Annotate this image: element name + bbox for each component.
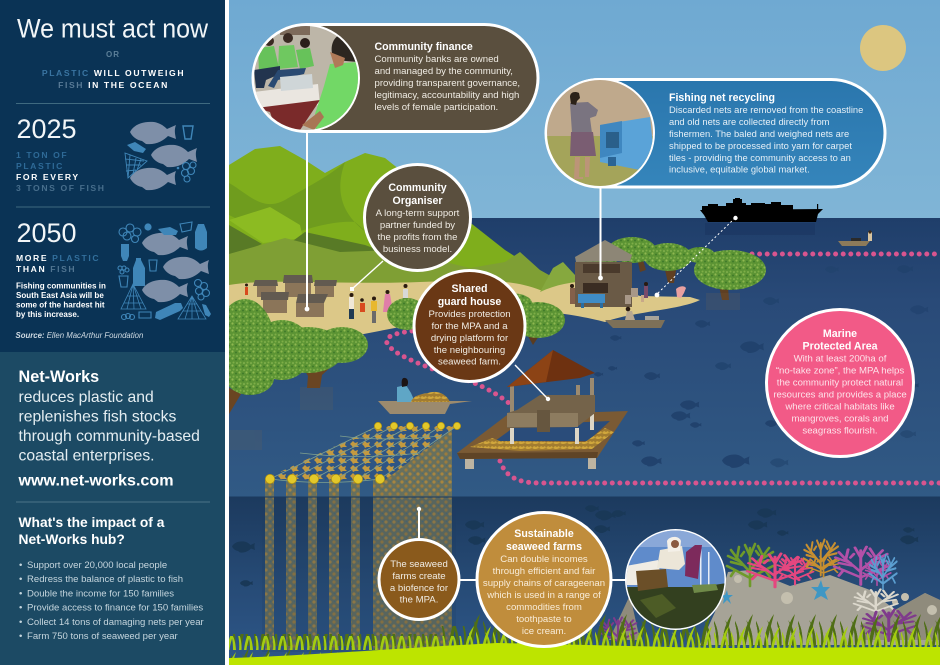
text: community organiser bbox=[376, 182, 460, 255]
icons: fish shoal bbox=[594, 265, 928, 468]
text: biofence: farms create bbox=[392, 571, 446, 582]
text: net-works intro: www.net-works.com bbox=[18, 472, 174, 490]
text: community finance: Community finance bbox=[374, 41, 473, 53]
text: net-works intro: through community-based bbox=[18, 428, 200, 445]
icon: 2025 fish and plastic bbox=[125, 122, 197, 190]
text: sustainable seaweed farms: which is used in a range of bbox=[486, 590, 601, 601]
text: community finance: Community banks are owned bbox=[374, 54, 499, 65]
text: fishing communities: some of the hardest hit bbox=[16, 300, 105, 310]
text: fishing net recycling: shipped to be processed into yarn for carpet bbox=[669, 141, 852, 151]
text: marine protected area: resources and provides a place bbox=[773, 390, 907, 400]
icon: 2050 fish and plastic bbox=[118, 222, 211, 320]
subheading: plastic will outweigh fish bbox=[42, 68, 185, 90]
subheading: plastic will outweigh fish: PLASTIC WILL OUTWEIGH bbox=[42, 68, 185, 78]
mountains bbox=[229, 146, 570, 305]
stat: 2025: 3 TONS OF FISH bbox=[16, 183, 106, 193]
text: marine protected area: “no-take zone”, the MPA helps bbox=[776, 366, 904, 376]
text: net-works intro: coastal enterprises. bbox=[18, 448, 155, 464]
list: impact: • bbox=[19, 574, 22, 585]
list: impact: • bbox=[19, 560, 22, 571]
text: sustainable seaweed farms: through efficient and fair bbox=[493, 566, 596, 577]
list: impact: • bbox=[19, 603, 22, 614]
text: biofence: The seaweed bbox=[390, 559, 448, 570]
text: fishing communities: by this increase. bbox=[16, 310, 79, 319]
text: sustainable seaweed farms: Can double incomes bbox=[500, 554, 588, 565]
text: sustainable seaweed farms: ice cream. bbox=[522, 626, 566, 637]
text: shared guard house: drying platform for bbox=[431, 333, 509, 344]
text: community organiser: A long-term support bbox=[376, 208, 460, 219]
callout: sustainable seaweed farms bbox=[477, 512, 611, 646]
text: shared guard house: the neighbouring bbox=[434, 345, 505, 356]
connector: finance bbox=[305, 132, 309, 311]
text: marine protected area: where critical habitats like bbox=[784, 402, 895, 412]
text: net-works intro: Net-Works bbox=[18, 368, 99, 386]
icons: fish shoal lower bbox=[232, 505, 918, 586]
text: community finance: providing transparent governance, bbox=[374, 78, 520, 89]
text: sustainable seaweed farms: Sustainable bbox=[514, 528, 574, 540]
villagers bbox=[245, 284, 408, 323]
heading: impact bbox=[18, 515, 165, 547]
coral reef: corals bbox=[600, 540, 915, 647]
source: Source: Ellen MacArthur Foundation bbox=[16, 331, 143, 340]
text: fishing net recycling bbox=[669, 92, 863, 174]
sea surface line bbox=[229, 496, 940, 498]
fishing boat: distance bbox=[838, 230, 872, 246]
text: fishing net recycling: inclusive, equitable global market. bbox=[669, 164, 810, 174]
callout: biofence bbox=[379, 507, 459, 620]
callout: fishing net recycling bbox=[545, 78, 885, 280]
seaweed boat bbox=[378, 378, 472, 414]
text: fishing net recycling: Fishing net recycling bbox=[669, 92, 775, 104]
stat: 2025: PLASTIC bbox=[16, 161, 64, 171]
text: community organiser: partner funded by bbox=[380, 220, 455, 231]
beach: left bbox=[229, 280, 580, 360]
text: community finance: and managed by the community, bbox=[374, 66, 513, 77]
stat: 2050 bbox=[16, 218, 100, 274]
seaweed farm: surface lines bbox=[265, 426, 457, 482]
text: marine protected area: With at least 200ha of bbox=[794, 354, 887, 364]
list: impact: Double the income for 150 families bbox=[27, 588, 174, 599]
list: impact: Collect 14 tons of damaging nets per year bbox=[27, 617, 205, 628]
callout: marine protected area bbox=[766, 310, 914, 456]
stat: 2025: FOR EVERY bbox=[16, 172, 80, 182]
pink buoy line: top bbox=[387, 254, 940, 483]
text: community organiser: Community bbox=[388, 182, 447, 194]
seagrass bbox=[229, 612, 940, 665]
list: impact: Farm 750 tons of seaweed per year bbox=[27, 631, 179, 642]
stat: 2050: 2050 bbox=[16, 218, 77, 248]
text: shared guard house: Shared bbox=[452, 283, 487, 295]
text: marine protected area: the community protect natural bbox=[777, 378, 903, 388]
text: marine protected area: mangroves, corals and bbox=[791, 414, 889, 424]
guard house: net recycling hut bbox=[575, 240, 638, 308]
panel: scene background bbox=[229, 0, 940, 665]
stat: 2025: 1 TON OF bbox=[16, 150, 68, 160]
text: sustainable seaweed farms: seaweed farms bbox=[506, 541, 582, 553]
text: marine protected area bbox=[773, 328, 907, 436]
text: shared guard house: guard house bbox=[438, 296, 501, 308]
text: biofence: a biofence for bbox=[390, 583, 449, 594]
heading: impact: What's the impact of a bbox=[18, 515, 165, 530]
text: community organiser: the profits from the bbox=[378, 232, 457, 243]
photo: seaweed harvest bbox=[625, 529, 727, 631]
boat: island bbox=[605, 307, 665, 328]
list: impact: • bbox=[19, 588, 22, 599]
trees: guard house side bbox=[387, 293, 565, 345]
text: sustainable seaweed farms bbox=[483, 528, 605, 637]
text: net-works intro: reduces plastic and bbox=[18, 389, 154, 406]
text: net-works intro: replenishes fish stocks bbox=[18, 408, 176, 426]
text: sustainable seaweed farms: commodities from bbox=[506, 602, 582, 613]
icon: sun bbox=[860, 25, 906, 71]
text: shared guard house: Provides protection bbox=[428, 309, 511, 320]
people: island bbox=[570, 282, 686, 304]
text: community finance bbox=[374, 41, 520, 113]
title: We must act now bbox=[17, 14, 208, 44]
text: community finance: levels of female participation. bbox=[374, 102, 498, 113]
coral reef: rocks bbox=[609, 570, 940, 645]
connector: seaweed farms to photo bbox=[610, 579, 627, 581]
list: impact: Provide access to finance for 150 families bbox=[27, 603, 203, 614]
text: fishing communities bbox=[16, 282, 106, 319]
text: community organiser: Organiser bbox=[392, 195, 443, 207]
connector: biofence to seaweed farms bbox=[459, 579, 477, 581]
text: community organiser: business model. bbox=[383, 244, 452, 255]
text: fishing communities: Fishing communities in bbox=[16, 282, 106, 290]
village huts bbox=[253, 275, 337, 317]
connector: net recycling bbox=[598, 188, 603, 280]
subheading: or: OR bbox=[106, 50, 120, 59]
stat: 2050: MORE PLASTIC bbox=[16, 253, 100, 263]
text: sustainable seaweed farms: supply chains of carageenan bbox=[483, 578, 605, 589]
text: biofence bbox=[390, 559, 449, 606]
text: fishing communities: South East Asia will be bbox=[16, 291, 104, 300]
text: community finance: legitimacy, accountability and high bbox=[374, 90, 519, 101]
buoys: seaweed farm bbox=[265, 422, 461, 484]
beach: right island bbox=[540, 262, 700, 322]
text: fishing net recycling: fishermen. The baled and weighed nets are bbox=[669, 129, 849, 139]
trees: right island mangroves bbox=[578, 237, 766, 310]
photo: net baling bbox=[545, 78, 655, 190]
text: biofence: the MPA. bbox=[400, 594, 438, 606]
text: shared guard house: seaweed farm. bbox=[438, 356, 501, 368]
connector: ship bbox=[655, 216, 738, 297]
text: shared guard house bbox=[428, 283, 511, 368]
stat: 2050: THAN FISH bbox=[16, 264, 76, 274]
text: marine protected area: Marine bbox=[823, 328, 857, 340]
photo: community finance meeting bbox=[254, 26, 360, 130]
text: marine protected area: seagrass flourish. bbox=[802, 426, 878, 436]
callout: community organiser bbox=[350, 164, 470, 291]
drying platform and guard house bbox=[457, 350, 628, 469]
panel: sidebar bbox=[0, 0, 229, 665]
text: sustainable seaweed farms: toothpaste to bbox=[516, 614, 572, 625]
ship bbox=[700, 198, 823, 235]
list: impact: Redress the balance of plastic to fish bbox=[27, 574, 183, 585]
trees: left mangroves bbox=[215, 299, 368, 450]
callout: shared guard house bbox=[414, 270, 550, 401]
text: shared guard house: for the MPA and a bbox=[431, 321, 508, 332]
heading: impact: Net-Works hub? bbox=[18, 532, 125, 547]
list: impact: • bbox=[19, 631, 22, 642]
stat: 2025: 2025 bbox=[16, 114, 77, 144]
stat: 2025 bbox=[16, 114, 106, 193]
subheading: plastic will outweigh fish: FISH IN THE OCEAN bbox=[58, 80, 169, 90]
text: fishing net recycling: tiles - providing the community access to an bbox=[669, 153, 851, 163]
text: fishing net recycling: and old nets are collected directly from bbox=[669, 117, 830, 127]
text: fishing net recycling: Discarded nets are removed from the coastline bbox=[669, 105, 863, 115]
list: impact: Support over 20,000 local people bbox=[27, 560, 167, 571]
connector: organiser bbox=[350, 261, 383, 291]
callout: community finance bbox=[250, 24, 538, 311]
connector: biofence bbox=[417, 507, 421, 538]
text: net-works intro bbox=[18, 368, 200, 490]
seaweed farm: submerged columns bbox=[262, 428, 456, 652]
connector: guard house bbox=[515, 365, 550, 401]
text: marine protected area: Protected Area bbox=[803, 340, 878, 352]
list: impact: • bbox=[19, 617, 22, 628]
list: impact bbox=[19, 560, 205, 642]
